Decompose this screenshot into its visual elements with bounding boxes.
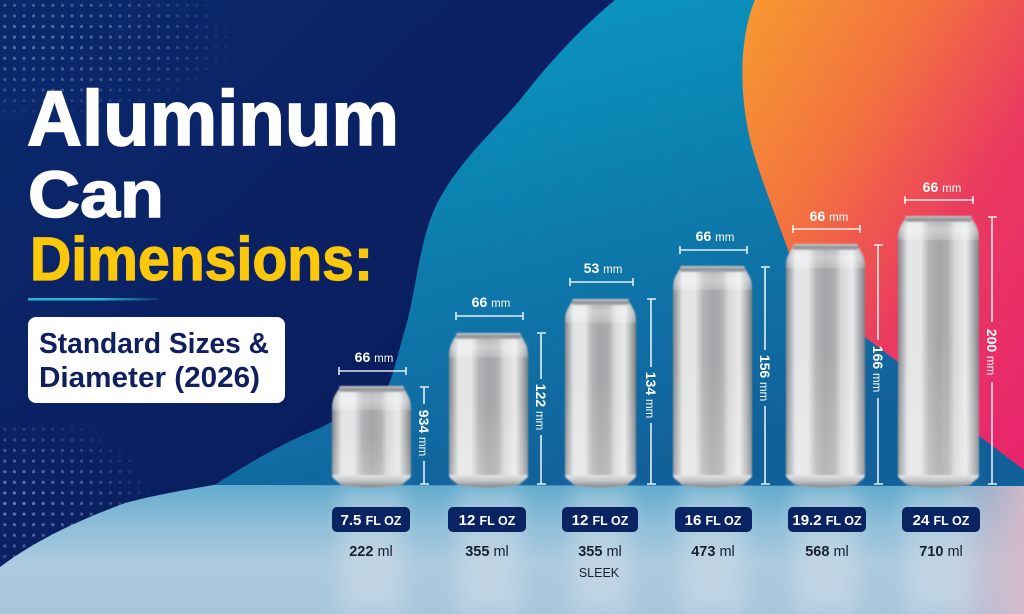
subtitle box: Standard Sizes & [39, 328, 269, 360]
height dimension: can 4: 156 mm [757, 355, 773, 401]
title: Dimensions: [30, 225, 373, 293]
dot pattern: top left [3, 4, 227, 112]
diameter dimension: can 2: 66 mm [472, 294, 510, 310]
size label: 7.5 fl oz, 222 ml [332, 507, 410, 560]
title: Can [28, 157, 164, 231]
height dimension: can 2: 122 mm [533, 384, 549, 430]
size label: 16 fl oz, 473 ml [675, 507, 752, 560]
background: orange to pink blob [742, 0, 1024, 470]
can 5: 19.2 fl oz [786, 244, 865, 488]
title divider [28, 298, 158, 300]
background: teal wave [0, 0, 1024, 490]
background: navy wave [0, 0, 615, 567]
height dimension: can 5: 166 mm [870, 346, 886, 392]
size label: 19.2 fl oz, 568 ml: 568 ml [805, 544, 849, 560]
size label: 12 fl oz, 355 ml: 355 ml [465, 544, 509, 560]
size label: 24 fl oz, 710 ml: 24 FL OZ [913, 512, 970, 529]
size label: 12 fl oz, 355 ml [448, 507, 526, 560]
diameter dimension: can 5 [793, 208, 860, 233]
can reflections on floor [340, 490, 972, 614]
size label: 12 fl oz sleek, 355 ml: 12 FL OZ [572, 512, 629, 529]
height dimension: can 4 [757, 267, 773, 484]
size label: 19.2 fl oz, 568 ml [788, 507, 866, 560]
can 4: 16 fl oz [673, 266, 752, 488]
diameter dimension: can 3 [570, 260, 633, 286]
height dimension: can 1 [416, 387, 432, 484]
diameter dimension: can 6: 66 mm [923, 179, 961, 195]
diameter dimension: can 5: 66 mm [810, 208, 848, 224]
title: Aluminum [27, 74, 399, 162]
dot pattern: bottom left [3, 428, 150, 558]
size label: 12 fl oz sleek, 355 ml: SLEEK [579, 566, 620, 580]
height dimension: can 3: 134 mm [643, 372, 659, 418]
subtitle box: Diameter (2026) [39, 362, 260, 394]
size label: 19.2 fl oz, 568 ml: 19.2 FL OZ [792, 512, 862, 529]
can 2: 12 fl oz [449, 333, 528, 488]
diameter dimension: can 4 [680, 228, 747, 254]
size label: 12 fl oz, 355 ml: 12 FL OZ [459, 512, 516, 529]
height dimension: can 5 [870, 245, 886, 484]
floor surface [0, 485, 1024, 614]
diameter dimension: can 2 [456, 294, 523, 320]
size label: 12 fl oz sleek, 355 ml [562, 507, 638, 580]
can 1: 7.5 fl oz [332, 386, 411, 488]
title [27, 74, 399, 293]
diameter dimension: can 6 [905, 179, 973, 204]
diameter dimension: can 1 [339, 349, 406, 375]
size label: 12 fl oz sleek, 355 ml: 355 ml [578, 544, 622, 560]
height dimension: can 6: 200 mm [984, 329, 1000, 375]
size label: 7.5 fl oz, 222 ml: 222 ml [349, 544, 393, 560]
diameter dimension: can 3: 53 mm [584, 260, 622, 276]
size label: 7.5 fl oz, 222 ml: 7.5 FL OZ [341, 512, 402, 529]
height dimension: can 2 [533, 333, 549, 484]
diameter dimension: can 4: 66 mm [696, 228, 734, 244]
size label: 24 fl oz, 710 ml [902, 507, 980, 560]
height dimension: can 6 [984, 217, 1000, 484]
can 3: 12 fl oz sleek [565, 299, 636, 488]
size label: 24 fl oz, 710 ml: 710 ml [919, 544, 963, 560]
diameter dimension: can 1: 66 mm [355, 349, 393, 365]
size label: 16 fl oz, 473 ml: 473 ml [691, 544, 735, 560]
size label: 16 fl oz, 473 ml: 16 FL OZ [685, 512, 742, 529]
height dimension: can 1: 934 mm [416, 410, 432, 456]
height dimension: can 3 [643, 299, 659, 484]
can 6: 24 fl oz [898, 216, 979, 488]
subtitle box [28, 317, 285, 403]
